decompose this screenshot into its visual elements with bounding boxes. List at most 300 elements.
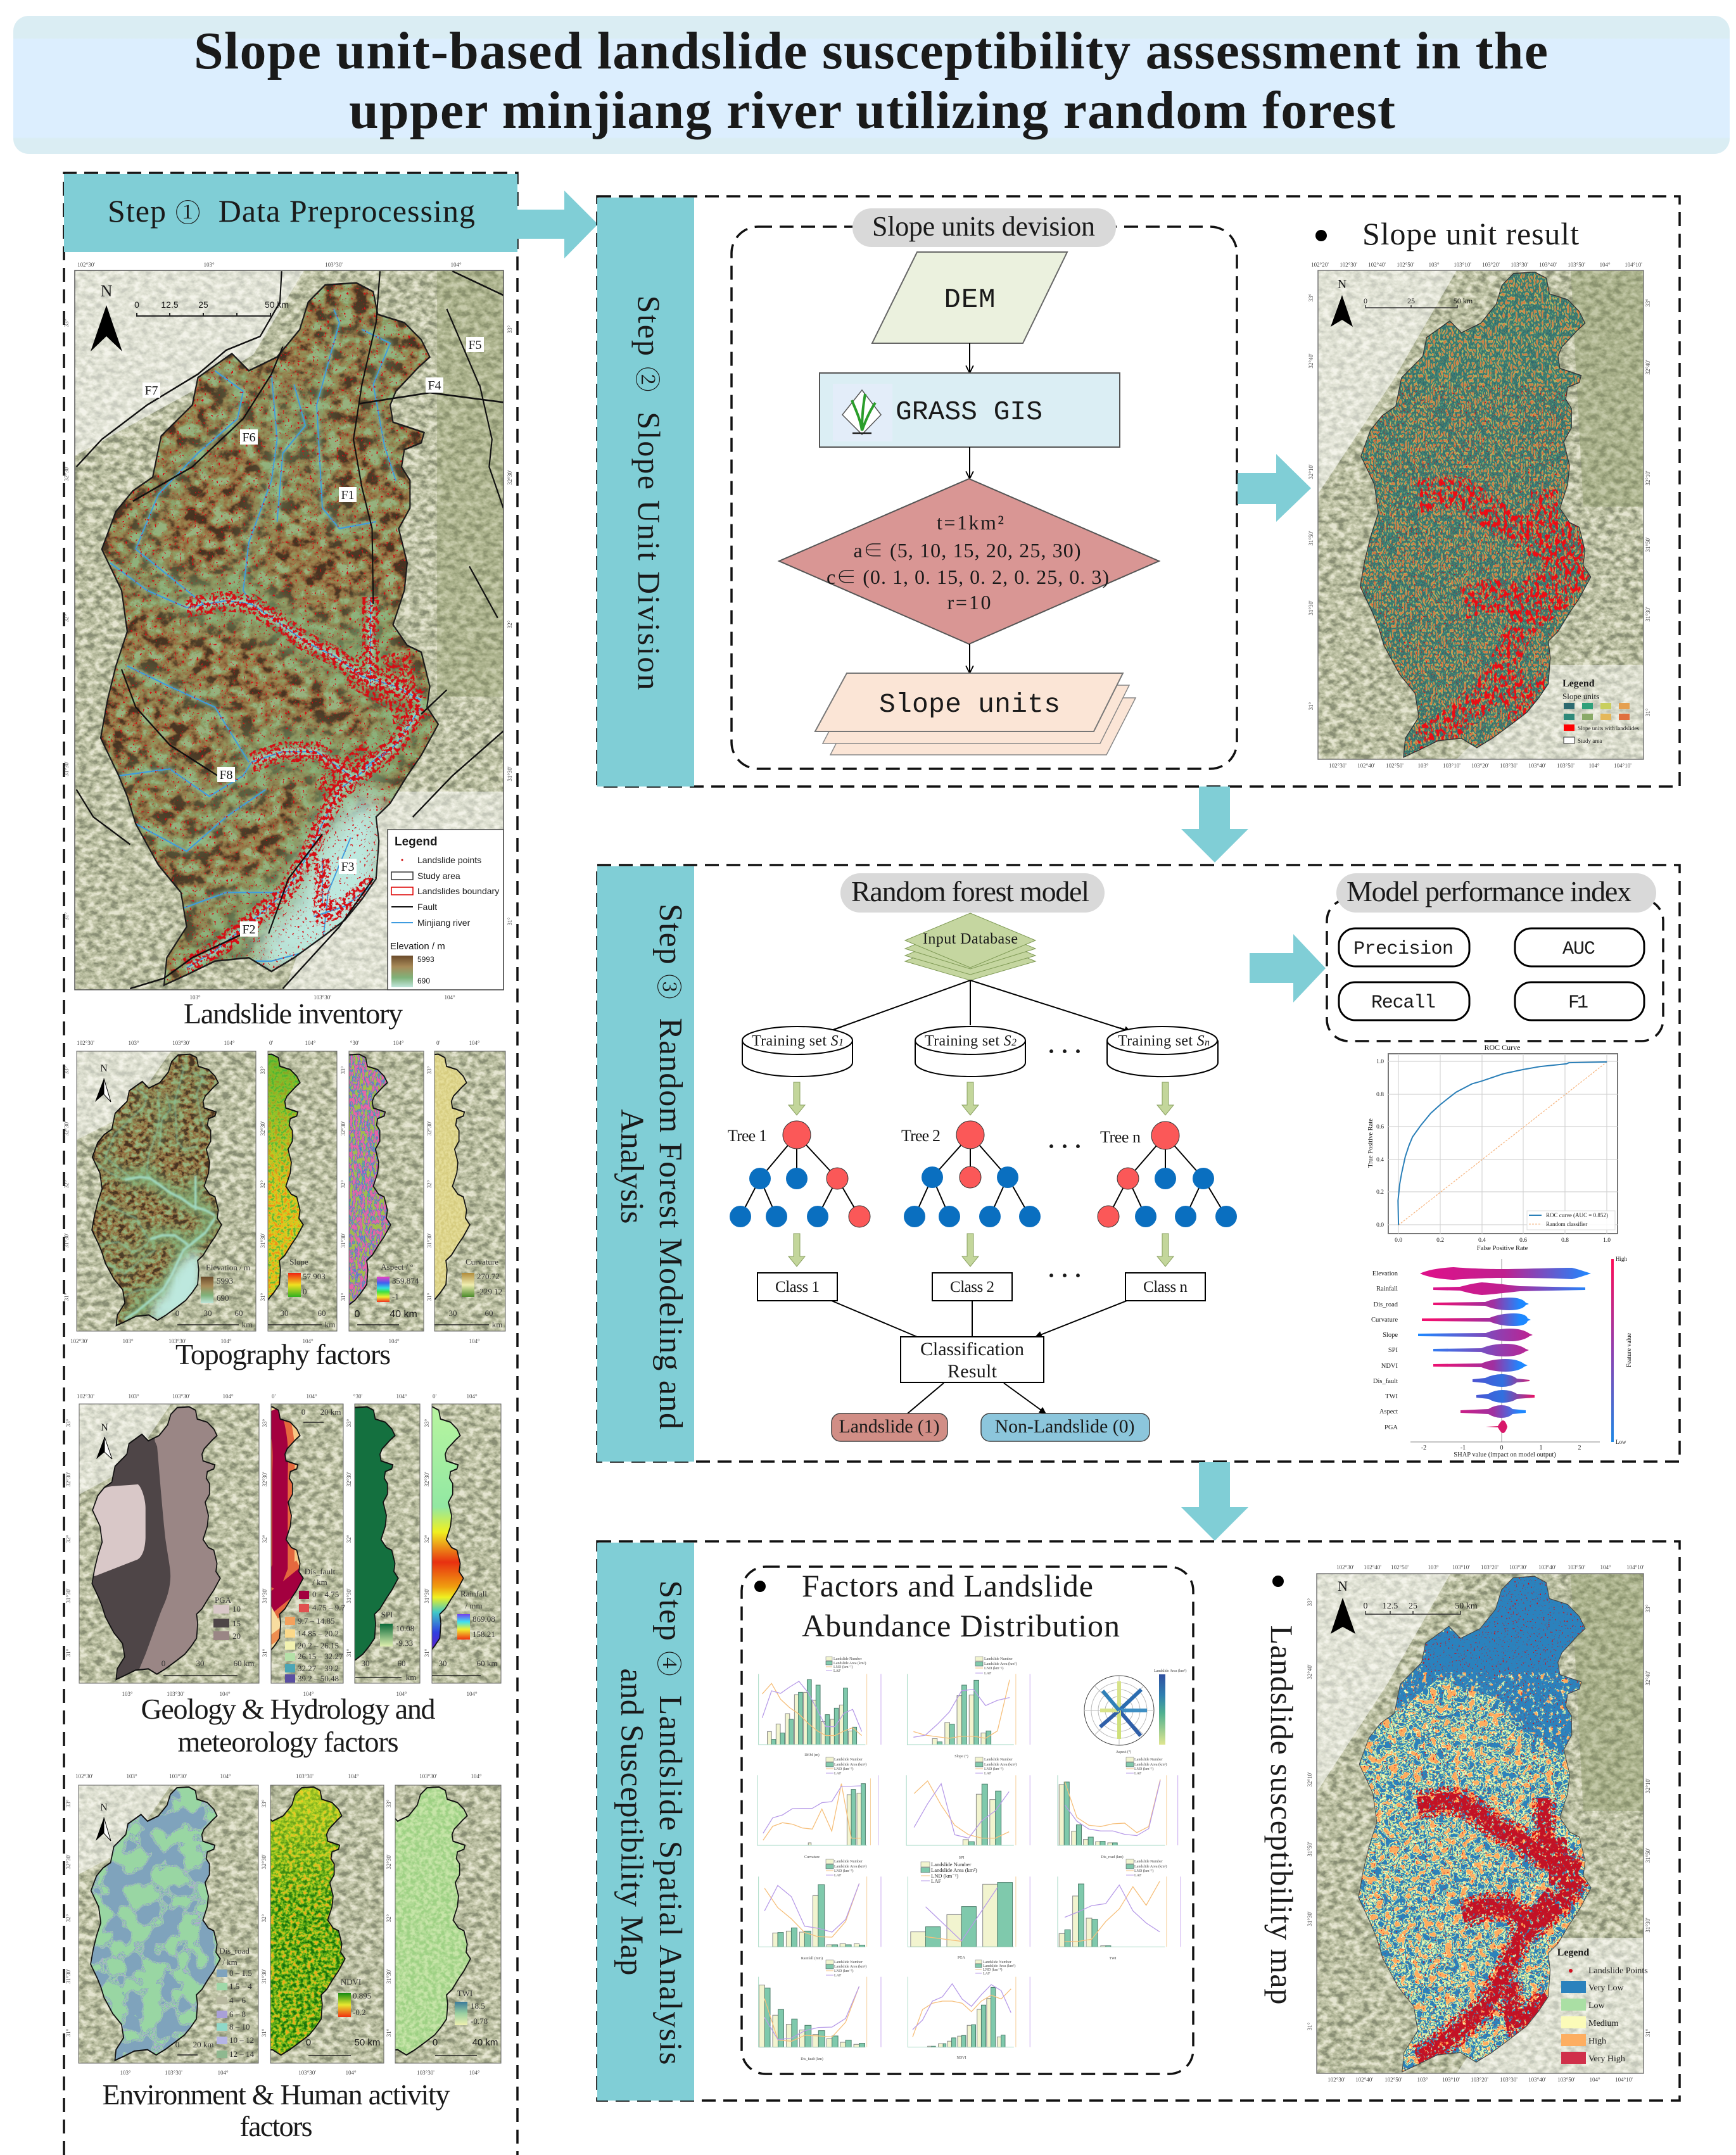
ticks: environment row: 32°30'	[65, 1854, 72, 1869]
map: NDVI: 0.895	[353, 1991, 371, 2000]
map: curvature: 60	[485, 1308, 493, 1318]
map: PGA: 10	[232, 1604, 241, 1614]
ticks: 32°10'	[1307, 1772, 1313, 1787]
scale bar: 12.5	[161, 300, 179, 310]
ticks: 102°40'	[1368, 262, 1386, 268]
ticks: geology row: 104°	[466, 1393, 478, 1400]
ticks: 102°50'	[1384, 2076, 1402, 2083]
ticks: topography row: 32°30'	[340, 1121, 346, 1136]
map: distance to road: 10 – 12	[229, 2035, 254, 2045]
random forest flowchart: · · ·	[1048, 1263, 1082, 1288]
chart legends: LND (km⁻²)	[931, 1873, 958, 1879]
map: TWI: -0.78	[471, 2016, 488, 2026]
step 2 side label	[597, 198, 694, 787]
map: TWI: 18.5	[471, 2001, 485, 2011]
panel: step 1 data preprocessing	[63, 173, 517, 2155]
ticks: geology row: 102°30'	[77, 1393, 94, 1400]
ticks: geology row: 32°	[65, 1534, 72, 1543]
chart legends: LAF	[984, 1672, 992, 1676]
beeswarm rows	[1418, 1267, 1591, 1433]
map coordinate ticks: 31°30'	[63, 761, 70, 776]
map: TWI: TWI	[457, 1988, 472, 1998]
ticks: geology row: 103°30'	[172, 1393, 190, 1400]
north arrow: N	[1338, 1578, 1348, 1594]
feature labels: Dis_road	[1373, 1301, 1398, 1308]
ticks: topography row	[63, 1040, 480, 1344]
map: slope	[267, 1051, 337, 1331]
chart: ROC curve: 0.0	[1395, 1237, 1402, 1244]
ticks: topography row: 31°30'	[426, 1233, 433, 1248]
ticks: environment row: 31°	[261, 2028, 267, 2037]
ticks: geology row: 33°	[424, 1419, 430, 1427]
ticks: 32°10'	[1308, 464, 1314, 479]
map coordinate ticks: 103°	[189, 994, 201, 1001]
model performance index: F1	[1568, 992, 1588, 1014]
fault labels: F7	[144, 384, 158, 398]
map coordinate ticks: 103°30'	[314, 994, 331, 1001]
ticks: topography row: 31°	[260, 1292, 266, 1301]
map: elevation	[77, 1050, 256, 1331]
ticks: 32°10'	[1645, 1778, 1651, 1793]
fault labels: F5	[468, 338, 482, 352]
title banner: Slope unit-based landslide susceptibility assessment in the	[194, 22, 1548, 80]
scale bar: 50 km	[265, 300, 289, 310]
feature value colour bar: High	[1616, 1256, 1628, 1262]
scale bar: 0	[134, 300, 139, 310]
ticks: geology row: 104°	[303, 1691, 314, 1697]
map: TWI	[334, 1783, 501, 2066]
map: SPI: km	[406, 1672, 416, 1682]
map: distance to road: / km	[222, 1957, 238, 1967]
ticks: topography row: 32°	[63, 1180, 70, 1188]
ticks: 103°20'	[1481, 1564, 1498, 1570]
heading pill: Slope units devision	[872, 211, 1095, 242]
ticks: topography row: 0'	[436, 1040, 440, 1046]
ticks: 102°50'	[1386, 762, 1403, 769]
chart: ROC curve: 0.8	[1376, 1092, 1384, 1098]
chart axis titles: PGA	[958, 1956, 966, 1960]
north arrow	[1331, 277, 1353, 327]
ticks: 31°30'	[1308, 600, 1314, 616]
feature value colour bar: Feature value	[1626, 1332, 1633, 1367]
fault labels: F3	[341, 860, 355, 874]
scale bar	[1364, 296, 1473, 308]
arrow: model to performance	[1250, 934, 1326, 1002]
map: distance to fault: 0	[301, 1407, 305, 1417]
map legend: High	[1588, 2037, 1606, 2046]
map: distance to fault	[271, 1403, 345, 1683]
chart: SHAP summary: SHAP value (impact on model output)	[1454, 1451, 1556, 1458]
ticks: 102°50'	[1397, 262, 1414, 268]
ticks: topography row: 33°	[63, 1066, 70, 1074]
chart: DEM	[759, 1674, 881, 1745]
ticks: geology row: 0'	[433, 1393, 436, 1400]
map: distance to road: 20 km	[193, 2040, 213, 2049]
class boxes: Class n	[1143, 1279, 1188, 1296]
ticks: 102°40'	[1357, 762, 1375, 769]
ticks: topography row: 32°30'	[63, 1121, 70, 1136]
chart: NDVI	[908, 1977, 1030, 2047]
map: elevation: 30	[204, 1308, 212, 1318]
chart: ROC curve: True Positive Rate	[1367, 1118, 1374, 1168]
ticks: 104°	[1589, 2076, 1600, 2083]
ticks: topography row: 32°	[426, 1180, 433, 1188]
chart legends: LAF	[931, 1878, 941, 1884]
map legend: 5993	[417, 955, 434, 964]
ticks: 102°50'	[1391, 1564, 1409, 1570]
ticks: topography row: 0'	[269, 1040, 273, 1046]
map coordinate ticks: 32°	[63, 614, 70, 622]
ticks: geology row: 33°	[65, 1419, 72, 1427]
caption: landslide inventory: Landslide inventory	[184, 997, 403, 1030]
class boxes: Class 2	[950, 1279, 994, 1296]
ticks: geology row: 103°	[128, 1393, 139, 1400]
scale bar: 50 km	[1454, 296, 1473, 305]
chart: curvature	[757, 1775, 878, 1845]
input database	[905, 913, 1036, 980]
map: distance to road: Dis_road	[219, 1946, 250, 1956]
chart: slope	[907, 1674, 1030, 1745]
ticks: topography row: 32°	[260, 1180, 266, 1188]
chart group rows 3 and 4	[759, 1876, 1181, 2047]
ticks: topography row: 31°	[426, 1292, 433, 1301]
chart legends: LND (km⁻²)	[1134, 1767, 1153, 1771]
output labels: Non-Landslide (0)	[994, 1416, 1135, 1437]
chart: ROC curve: 1.0	[1376, 1059, 1384, 1065]
ticks: topography row: 104°	[305, 1040, 316, 1046]
ticks: topography row: 31°	[340, 1292, 346, 1301]
map coordinate ticks	[63, 262, 513, 1001]
map: slope unit result	[1308, 262, 1651, 769]
chart: ROC curve	[1367, 1043, 1618, 1252]
parameters decision diamond: t=1km²	[937, 511, 1004, 534]
map: slope: 30	[280, 1308, 289, 1318]
map legend: Study area	[417, 871, 460, 881]
map: aspect	[348, 1051, 424, 1331]
ticks: 103°40'	[1528, 762, 1546, 769]
ticks: topography row: 102°30'	[70, 1338, 88, 1344]
chart legends: Landslide Number	[834, 1961, 863, 1964]
chart legends: Landslide Area (km²)	[984, 1662, 1017, 1666]
map: aspect: -1	[392, 1292, 399, 1301]
ticks: 103°10'	[1454, 262, 1471, 268]
chart: ROC curve: 0.2	[1376, 1189, 1384, 1196]
ticks: 31°30'	[1645, 607, 1651, 622]
metric pills	[1339, 928, 1644, 1020]
ticks: 32°40'	[1307, 1664, 1313, 1679]
ticks: geology row: 33°	[346, 1419, 352, 1427]
random forest flowchart	[728, 873, 1237, 1441]
green arrows to trees	[789, 1082, 1174, 1115]
map: PGA: 30	[196, 1659, 204, 1668]
title banner	[13, 16, 1730, 154]
feature labels: Curvature	[1371, 1317, 1398, 1324]
ticks: geology row: 104°	[222, 1393, 234, 1400]
map: PGA	[79, 1402, 259, 1697]
map coordinate ticks: 31°30'	[507, 766, 513, 781]
fault labels: F1	[341, 488, 355, 502]
ticks: 103°10'	[1443, 762, 1460, 769]
heading: Abundance Distribution	[802, 1608, 1120, 1643]
ticks: geology row: 33°	[262, 1419, 268, 1427]
map: distance to fault: 4.75 – 9.7	[312, 1603, 346, 1612]
tree 1: Tree 1	[728, 1127, 767, 1145]
chart legends: LND (km⁻²)	[1134, 1869, 1153, 1873]
ticks: 102°20'	[1311, 262, 1329, 268]
ticks: environment row: 32°	[261, 1914, 267, 1922]
map: distance to road	[79, 1783, 258, 2066]
map: distance to fault: 39.2 – 50.48	[298, 1674, 339, 1683]
geology, hydrology and meteorology factor maps	[65, 1393, 501, 1697]
feature labels: Elevation	[1372, 1270, 1398, 1277]
map: elevation: km	[242, 1320, 252, 1329]
map: distance to fault: 14.85 – 20.2	[298, 1629, 339, 1638]
step 4 side label: Step ④ Landslide Spatial Analysis	[652, 1581, 688, 2064]
ticks: environment row: 103°30'	[298, 2070, 316, 2076]
ticks: 103°50'	[1557, 762, 1574, 769]
map: SPI	[355, 1403, 421, 1683]
tree 2	[901, 1121, 1041, 1227]
chart legends: Landslide Area (km²)	[1134, 1864, 1167, 1869]
ticks: environment row: 32°30'	[261, 1854, 267, 1869]
map legend: Medium	[1588, 2019, 1619, 2028]
DEM input: DEM	[944, 284, 996, 316]
ticks: geology row: 31°	[65, 1648, 72, 1657]
chart legends: Landslide Number	[1134, 1758, 1163, 1762]
tree 1	[728, 1121, 870, 1227]
ticks: environment row: 31°30'	[386, 1969, 392, 1984]
north arrow: N	[1338, 277, 1346, 291]
map: distance to fault: 20.2 – 26.15	[298, 1641, 339, 1650]
chart legends: Landslide Area (km²)	[834, 1864, 866, 1869]
ticks: 32°10'	[1645, 471, 1651, 486]
feature labels: Dis_fault	[1373, 1378, 1398, 1385]
classification result: Classification	[920, 1339, 1024, 1360]
ticks: 103°	[1417, 2076, 1428, 2083]
ticks: geology row: 32°	[424, 1534, 430, 1543]
map: PGA: 60 km	[234, 1659, 254, 1668]
chart: SHAP summary: 0	[1500, 1444, 1504, 1451]
ticks: 102°30'	[1327, 2076, 1345, 2083]
fault labels: F8	[219, 768, 233, 782]
scale bar: 0	[1363, 1602, 1368, 1611]
scale bar	[134, 300, 289, 316]
scale bar: 12.5	[1383, 1602, 1398, 1611]
map: distance to road: 1.5 – 4	[229, 1981, 252, 1991]
parameters decision diamond: r=10	[947, 591, 991, 614]
ticks: environment row: 104°	[345, 2070, 357, 2076]
ticks: 103°30'	[1500, 762, 1517, 769]
panel: step 3 random forest modeling and analysis	[597, 865, 1680, 1462]
map coordinate ticks: 33°	[507, 325, 513, 333]
map legend: Very Low	[1588, 1983, 1624, 1993]
map: PGA: 15	[232, 1619, 241, 1628]
ticks: 32°40'	[1645, 360, 1651, 375]
ticks: environment row: 32°	[386, 1914, 392, 1922]
ticks: topography row: 31°	[63, 1292, 70, 1301]
ticks: environment row: 103°	[126, 1773, 137, 1779]
map: rainfall	[329, 1404, 501, 1683]
chart legends: Landslide Area (km²)	[931, 1867, 977, 1873]
ticks: topography row: 103°30'	[172, 1040, 190, 1046]
map: SPI: SPI	[381, 1610, 393, 1619]
map legend: Landslides boundary	[417, 886, 499, 896]
training sets: Training set S1	[752, 1033, 844, 1049]
ticks: 31°30'	[1307, 1911, 1313, 1926]
output labels: Landslide (1)	[839, 1416, 940, 1437]
scale bar	[1363, 1602, 1478, 1614]
ticks: geology row: 31°30'	[424, 1588, 430, 1603]
ticks: geology row: 103°	[122, 1691, 133, 1697]
step 4 side label	[597, 1543, 694, 2101]
ticks: environment row: 33°	[261, 1799, 267, 1807]
feature labels: Aspect	[1379, 1408, 1398, 1415]
ticks: 102°40'	[1355, 2076, 1373, 2083]
ticks: geology row: 32°30'	[424, 1472, 430, 1487]
ticks: geology row: 32°	[262, 1534, 268, 1543]
ticks: topography row: 32°30'	[260, 1121, 266, 1136]
map: curvature: Curvature	[466, 1257, 498, 1267]
chart legends: Landslide Number	[1134, 1860, 1163, 1864]
map: distance to fault: Dis_fault	[305, 1567, 336, 1576]
feature labels: PGA	[1384, 1424, 1398, 1431]
ticks: topography row: 104°	[224, 1040, 235, 1046]
heading: Factors and Landslide	[802, 1568, 1093, 1603]
slope units output	[815, 673, 1136, 755]
chart: ROC curve: ROC Curve	[1485, 1043, 1520, 1052]
map: rainfall: Rainfall	[460, 1589, 487, 1598]
ticks: topography row: 104°	[220, 1338, 232, 1344]
ticks: 103°40'	[1538, 1564, 1556, 1570]
chart legends: Landslide Area (km²)	[983, 1964, 1015, 1968]
ticks: environment row: 31°	[65, 2028, 72, 2037]
chart legends: Landslide Area (km²)	[984, 1762, 1017, 1767]
random forest flowchart: · · ·	[1048, 1039, 1082, 1064]
chart legends: LAF	[984, 1772, 992, 1776]
ticks: 104°	[1600, 1564, 1611, 1570]
map: curvature: km	[492, 1320, 502, 1329]
ticks: environment row	[65, 1773, 482, 2076]
map coordinate ticks: 103°	[203, 262, 215, 268]
map coordinate ticks: 104°	[450, 262, 462, 268]
map: distance to fault: 32.27 – 39.2	[298, 1664, 339, 1673]
map: distance to road: 0 – 1.5	[229, 1968, 252, 1978]
ticks: environment row: 103°30'	[417, 2070, 434, 2076]
ticks: environment row: 33°	[386, 1799, 392, 1807]
chart: SHAP summary	[1371, 1256, 1633, 1458]
ticks: environment row: 103°30'	[419, 1773, 437, 1779]
map: slope: 60	[318, 1308, 326, 1318]
random forest flowchart: · · ·	[1048, 1134, 1082, 1159]
chart legends: LND (km⁻²)	[834, 1969, 853, 1973]
map: distance to road: 12 – 14	[229, 2049, 255, 2059]
ticks: topography row: 104°	[302, 1338, 314, 1344]
feature value colour bar: Low	[1616, 1439, 1626, 1445]
map legend: Legend	[1562, 678, 1595, 689]
map: TWI: 40 km	[472, 2037, 498, 2048]
arrow: step 1 to step 2	[517, 191, 598, 258]
map: elevation: Elevation / m	[206, 1263, 250, 1272]
map: SPI: 30	[361, 1659, 370, 1668]
ticks: environment row: 103°30'	[296, 1773, 314, 1779]
map: slope: 0	[303, 1287, 307, 1296]
chart: ROC curve: 0.6	[1376, 1124, 1384, 1130]
ticks: 103°50'	[1568, 1564, 1585, 1570]
ticks: geology row: 32°30'	[346, 1472, 352, 1487]
ticks: 33°	[1645, 298, 1651, 307]
ticks: topography row: 33°	[426, 1066, 433, 1074]
caption: geology and hydrology factors	[141, 1693, 436, 1758]
training sets	[742, 1027, 1218, 1077]
icon: north arrow	[91, 282, 122, 351]
chart: ROC curve: False Positive Rate	[1477, 1245, 1528, 1252]
output labels	[832, 1413, 1150, 1441]
chart legends: Landslide Number	[984, 1758, 1013, 1762]
fault labels: F6	[242, 431, 256, 445]
chart legends: Landslide Number	[833, 1657, 862, 1661]
map: NDVI: -0.2	[353, 2007, 366, 2017]
chart: SPI	[906, 1775, 1030, 1845]
chart legends: Landslide Area (km²)	[1134, 1762, 1167, 1767]
map: elevation: 60	[234, 1308, 243, 1318]
chart legends	[826, 1657, 1167, 1978]
model performance index	[1327, 873, 1663, 1041]
ticks: 102°40'	[1364, 1564, 1381, 1570]
chart legends: LAF	[833, 1669, 841, 1673]
scale bar: 25	[198, 300, 208, 310]
flowchart: slope units division	[732, 208, 1237, 769]
ticks: geology row: 31°	[262, 1648, 268, 1657]
chart: aspect polar: Aspect (°)	[1116, 1750, 1131, 1754]
feature labels: SPI	[1388, 1347, 1398, 1354]
ticks: 103°	[1428, 262, 1440, 268]
map: curvature: 30	[448, 1308, 457, 1318]
ticks: 103°10'	[1442, 2076, 1460, 2083]
ticks: 104°10'	[1626, 1564, 1644, 1570]
map: distance to fault: / km	[312, 1577, 327, 1587]
map legend: Landslide Points	[1588, 1966, 1648, 1976]
chart legends: LAF	[983, 1972, 991, 1976]
topography factor maps	[63, 1040, 505, 1344]
ticks: 103°20'	[1482, 262, 1500, 268]
landslide susceptibility map heading: Landslide susceptibility map	[1264, 1625, 1300, 2005]
ticks: environment row: 32°	[65, 1914, 72, 1922]
feature labels	[1371, 1270, 1398, 1431]
map: aspect: Aspect / °	[381, 1262, 414, 1272]
ticks: topography row: 104°	[393, 1040, 404, 1046]
chart: ROC curve: 0.6	[1519, 1237, 1527, 1244]
ticks: 102°30'	[1340, 262, 1357, 268]
ticks: environment row: 103°30'	[169, 1773, 187, 1779]
ticks: 103°20'	[1471, 762, 1489, 769]
ticks: 104°	[1599, 262, 1611, 268]
slope units output: Slope units	[879, 689, 1060, 720]
ticks: 104°10'	[1615, 2076, 1633, 2083]
map: TWI: 0	[433, 2037, 438, 2048]
training sets: Training set Sn	[1118, 1033, 1210, 1049]
caption: environment and human activity factors	[103, 2078, 450, 2142]
chart legends: LND (km⁻²)	[834, 1767, 853, 1771]
map: NDVI	[209, 1783, 384, 2066]
ticks: 103°50'	[1557, 2076, 1575, 2083]
ticks: geology row: 104°	[466, 1691, 478, 1697]
chart: ROC curve: 0.8	[1561, 1237, 1569, 1244]
chart: SHAP summary: 1	[1539, 1444, 1543, 1451]
chart: SHAP summary: -2	[1421, 1444, 1426, 1451]
scale bar: 0	[1364, 296, 1367, 305]
ticks: 31°	[1307, 2022, 1313, 2030]
ticks: geology row: 32°	[346, 1534, 352, 1543]
